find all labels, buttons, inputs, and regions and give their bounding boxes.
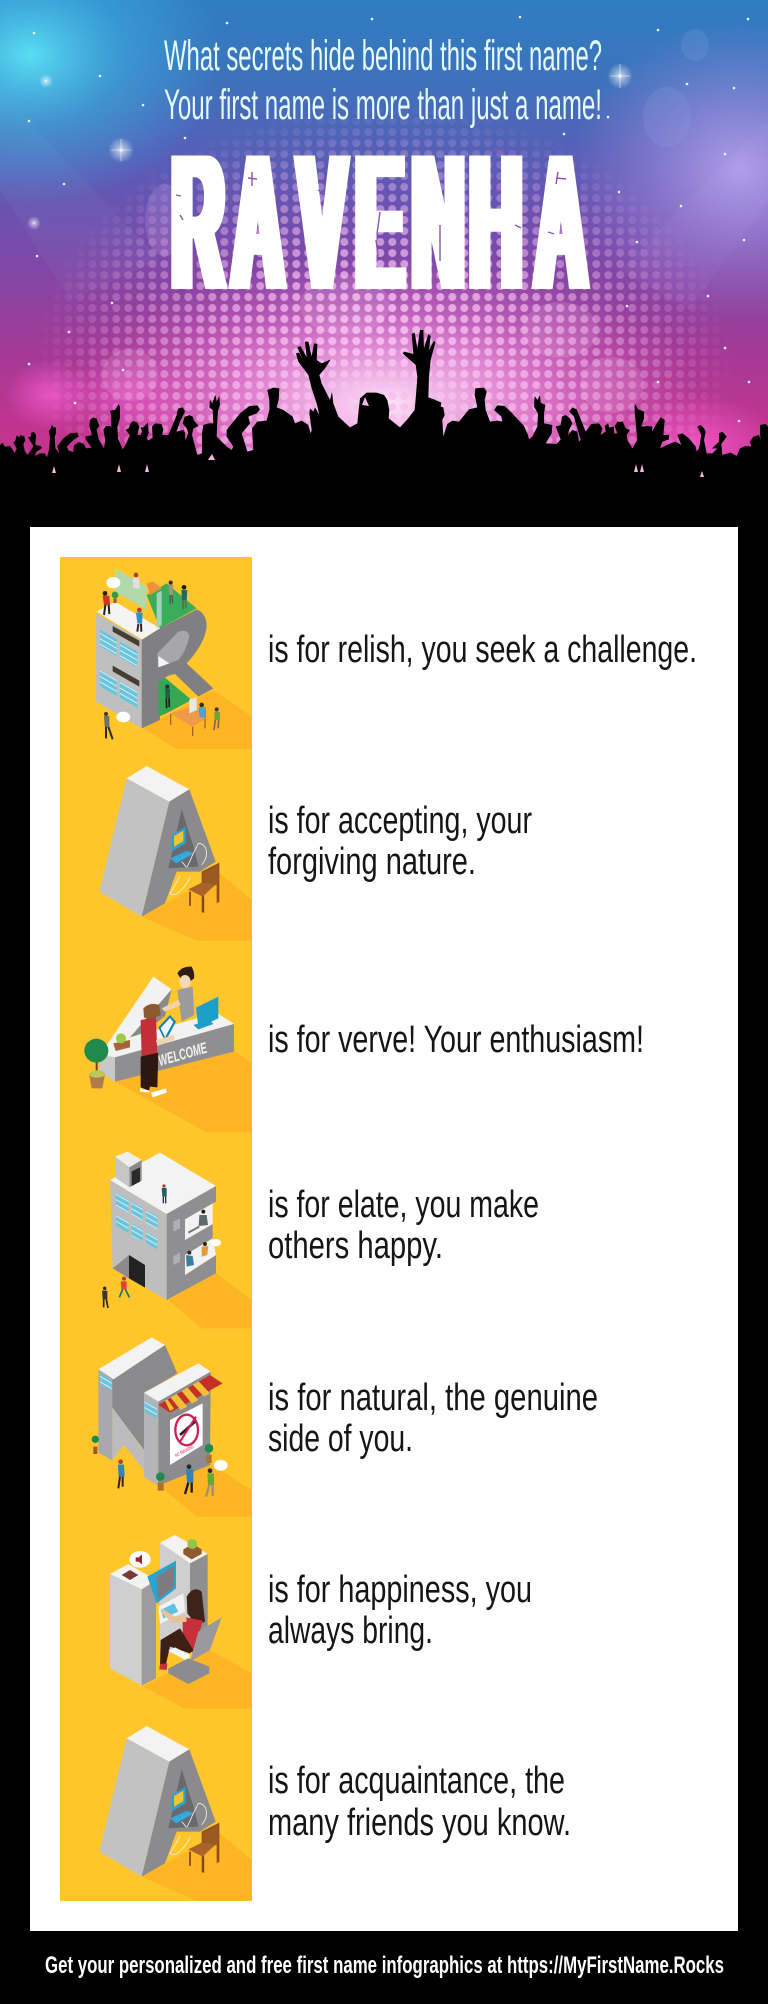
row N text: side of you.	[268, 1418, 413, 1460]
no smoking sign	[170, 1403, 203, 1465]
people on and around the building	[102, 1184, 221, 1308]
no smoking sign: NO SMOKING	[174, 1444, 195, 1459]
row E text	[268, 1184, 539, 1267]
row A2 text: is for acquaintance, the	[268, 1760, 565, 1802]
text rows	[268, 629, 697, 1844]
row A text	[268, 800, 532, 883]
striped awning	[158, 1375, 223, 1413]
office chair	[168, 1617, 222, 1684]
row H text: is for happiness, you	[268, 1569, 532, 1611]
illustration: letter A tile	[99, 766, 252, 941]
heading: name RAVENHA: RAVENHA	[172, 114, 587, 330]
N building	[98, 1337, 211, 1486]
row A text: is for accepting, your	[268, 800, 532, 842]
illustration: letter R tile	[96, 568, 252, 749]
row H text	[268, 1569, 532, 1652]
yellow illustration column	[60, 557, 252, 1901]
illustration: letter N shop tile	[92, 1337, 252, 1517]
visitor with tablet	[140, 1004, 176, 1097]
row V text: is for verve! Your enthusiasm!	[268, 1019, 644, 1061]
heading: tagline	[164, 32, 602, 129]
plants	[84, 1033, 130, 1088]
row H text: always bring.	[268, 1610, 433, 1652]
illustration: letter E building tile	[102, 1152, 252, 1328]
row N text	[268, 1377, 598, 1460]
desk and people	[103, 573, 220, 739]
main white panel	[30, 527, 738, 1931]
illustration: letter V reception tile	[84, 967, 252, 1132]
row A2 text: many friends you know.	[268, 1802, 571, 1844]
illustration: letter H workstation tile	[110, 1535, 252, 1709]
row A text: forgiving nature.	[268, 841, 476, 883]
V reception desk: WELCOME	[156, 1040, 210, 1070]
row E text: others happy.	[268, 1225, 443, 1267]
monitor and desk	[147, 1561, 185, 1624]
row A2 text	[268, 1760, 571, 1844]
H pillars	[110, 1535, 208, 1686]
woman at the desk	[159, 1589, 205, 1670]
illustration: second letter A tile	[99, 1726, 252, 1901]
E building	[110, 1152, 216, 1300]
crowd silhouette	[0, 330, 768, 528]
speech bubble, tablet and plant	[122, 1539, 202, 1580]
stars and sparkles	[27, 16, 750, 422]
plants and people	[92, 1436, 228, 1497]
R building	[96, 568, 213, 728]
header concert background	[0, 0, 768, 458]
row E text: is for elate, you make	[268, 1184, 539, 1226]
receptionist and monitor	[162, 967, 218, 1029]
V reception desk	[100, 977, 234, 1082]
row N text: is for natural, the genuine	[268, 1377, 598, 1419]
